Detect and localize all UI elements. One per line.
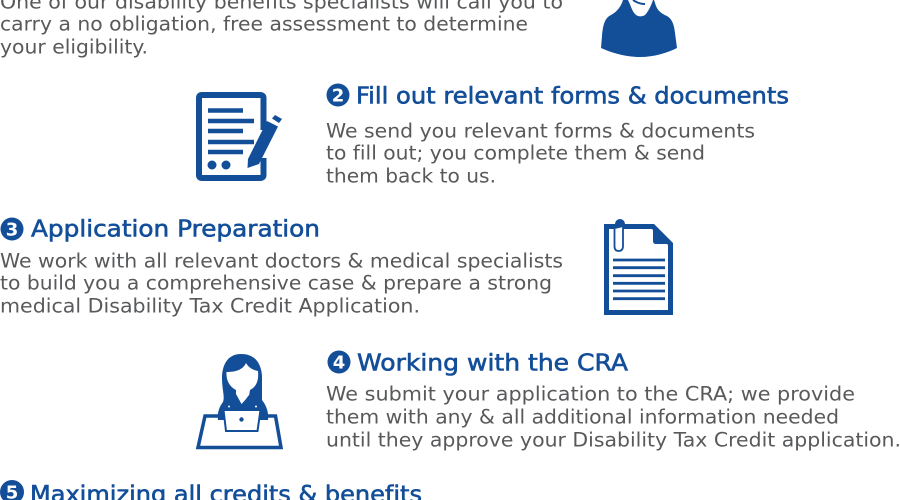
step 4 text [326, 382, 900, 452]
step 3 text: to build you a comprehensive case & prepare a strong [0, 272, 552, 294]
step 1 text: carry a no obligation, free assessment to determine [0, 12, 528, 36]
step 2 text: We send you relevant forms & documents [326, 120, 755, 142]
icon: form with pen [199, 95, 282, 178]
step 4 text: them with any & all additional information needed [326, 406, 839, 428]
step 2 text: them back to us. [326, 164, 496, 188]
step 4 text: We submit your application to the CRA; we provide [326, 382, 855, 406]
step 4 text: until they approve your Disability Tax Credit application. [326, 428, 900, 452]
step 2 heading: 2 [332, 86, 344, 106]
step 3 heading: Application Preparation [31, 216, 320, 242]
step 4 heading: Working with the CRA [357, 350, 628, 376]
step 1 text: your eligibility. [0, 36, 148, 58]
step 2 text: to fill out; you complete them & send [326, 142, 705, 164]
step 3 text: We work with all relevant doctors & medical specialists [0, 250, 563, 272]
step 2 text [326, 120, 755, 188]
step 3 text [0, 250, 563, 318]
icon: document with paperclip [606, 219, 672, 312]
step 3 heading: 3 [6, 220, 18, 240]
step 3 text: medical Disability Tax Credit Application. [0, 294, 420, 318]
step 2 heading: Fill out relevant forms & documents [356, 84, 789, 110]
icon: specialist with headset [601, 0, 677, 57]
step 1 text [0, 0, 563, 58]
icon: person at laptop [198, 354, 281, 448]
step 4 heading: 4 [333, 352, 345, 374]
